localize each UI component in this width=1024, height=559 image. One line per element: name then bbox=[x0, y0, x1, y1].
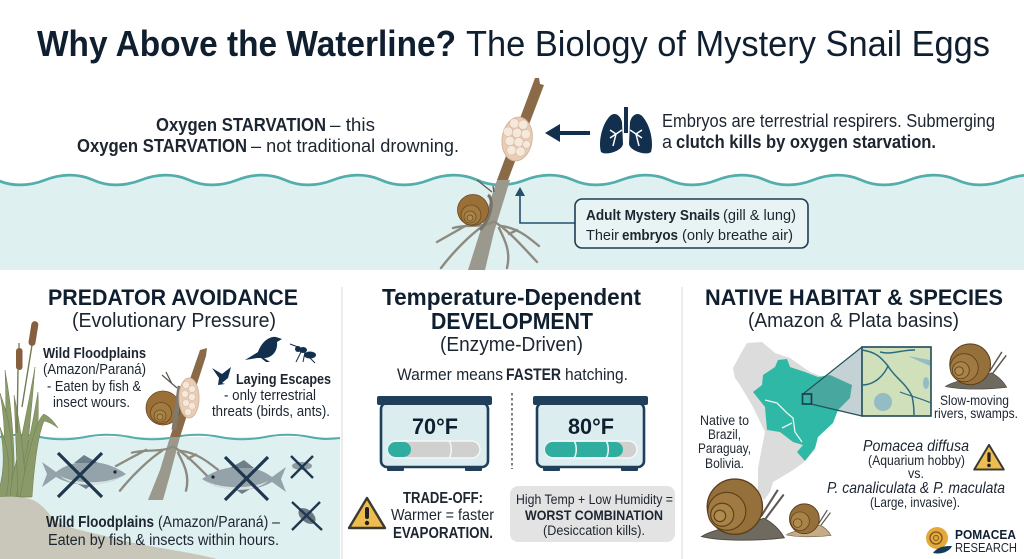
callout: adults vs embryos: Adult Mystery Snails bbox=[586, 207, 720, 224]
worst combination box bbox=[510, 486, 675, 542]
warmer means faster: hatching. bbox=[565, 365, 628, 384]
wild floodplains caption bbox=[46, 514, 280, 549]
subheading: (Evolutionary Pressure) bbox=[72, 310, 276, 332]
title bbox=[37, 23, 990, 64]
stick, snail and eggs bbox=[116, 348, 218, 500]
laying escapes note: Laying Escapes bbox=[236, 371, 331, 388]
wild floodplains note bbox=[43, 345, 146, 411]
wild floodplains note: (Amazon/Paraná) bbox=[43, 361, 146, 378]
native note bbox=[698, 413, 751, 471]
wild floodplains note: - Eaten by fish & bbox=[47, 378, 141, 395]
inset map bbox=[802, 347, 931, 416]
callout: adults vs embryos: embryos bbox=[622, 227, 678, 244]
callout: adults vs embryos: (only breathe air) bbox=[682, 227, 793, 244]
embryos text: a bbox=[662, 132, 673, 152]
warmer means faster: FASTER bbox=[506, 365, 561, 384]
sand bank bbox=[0, 497, 217, 559]
species comparison: (Large, invasive). bbox=[870, 494, 960, 510]
logo bbox=[926, 527, 1017, 555]
tank 70F: 70°F bbox=[412, 414, 458, 439]
icon: flying bird bbox=[212, 367, 231, 385]
map: South America bbox=[733, 342, 852, 500]
oxygen starvation text: – not traditional drowning. bbox=[251, 136, 459, 156]
icon: large snail bbox=[702, 479, 784, 540]
logo: POMACEA bbox=[955, 527, 1017, 542]
trade-off note: TRADE-OFF: bbox=[403, 490, 483, 507]
species comparison: (Aquarium hobby) bbox=[868, 452, 965, 468]
species comparison: vs. bbox=[908, 466, 924, 481]
icon: warning bbox=[349, 498, 385, 528]
divider bbox=[511, 393, 513, 469]
native note: Brazil, bbox=[708, 427, 741, 442]
wild floodplains caption: (Amazon/Paraná) – bbox=[158, 514, 280, 531]
laying escapes note: threats (birds, ants). bbox=[212, 403, 330, 420]
callout arrow bbox=[515, 187, 576, 223]
native note: Native to bbox=[700, 413, 749, 428]
wild floodplains note: insect wours. bbox=[53, 394, 130, 411]
callout: adults vs embryos: (gill & lung) bbox=[723, 207, 796, 224]
warmer means faster bbox=[397, 365, 628, 384]
icon: snail top right bbox=[946, 344, 1007, 389]
worst combination box: WORST COMBINATION bbox=[525, 507, 663, 523]
native note: Paraguay, bbox=[698, 441, 751, 456]
oxygen starvation text: Oxygen STARVATION bbox=[77, 136, 247, 156]
crossed insects bbox=[291, 456, 322, 530]
native note: Bolivia. bbox=[705, 456, 744, 471]
callout: adults vs embryos: Their bbox=[586, 227, 619, 244]
heading: Temperature-Dependent bbox=[382, 284, 641, 310]
callout: adults vs embryos bbox=[575, 199, 808, 248]
trade-off note: EVAPORATION. bbox=[393, 525, 493, 542]
panel dividers bbox=[341, 287, 683, 559]
worst combination box: High Temp + Low Humidity = bbox=[516, 492, 673, 507]
subheading: (Amazon & Plata basins) bbox=[748, 310, 959, 332]
oxygen starvation text: Oxygen STARVATION bbox=[156, 115, 326, 135]
heading: PREDATOR AVOIDANCE bbox=[48, 285, 298, 310]
heading: NATIVE HABITAT & SPECIES bbox=[705, 285, 1003, 310]
slow-moving note: Slow-moving bbox=[940, 392, 1009, 408]
crossed fish bbox=[42, 453, 286, 500]
oxygen starvation text: – this bbox=[330, 115, 375, 135]
title: Why Above the Waterline? bbox=[37, 23, 456, 64]
heading bbox=[382, 284, 641, 334]
tank 80F bbox=[533, 396, 648, 471]
tank 80F: 80°F bbox=[568, 414, 614, 439]
wild floodplains caption: Eaten by fish & insects within hours. bbox=[48, 532, 279, 549]
oxygen starvation text bbox=[77, 115, 459, 156]
reeds bbox=[0, 321, 58, 497]
icon: small snail bbox=[786, 504, 831, 537]
embryos text: Embryos are terrestrial respirers. Submerging bbox=[662, 111, 995, 131]
heading: DEVELOPMENT bbox=[431, 308, 593, 334]
title: The Biology of Mystery Snail Eggs bbox=[466, 23, 990, 64]
species comparison bbox=[827, 438, 1005, 510]
panel: native habitat bbox=[698, 285, 1018, 555]
tank 70F bbox=[377, 396, 492, 471]
laying escapes note bbox=[212, 371, 331, 420]
wild floodplains note: Wild Floodplains bbox=[43, 345, 146, 362]
embryos text bbox=[662, 111, 995, 152]
worst combination box: (Desiccation kills). bbox=[543, 523, 645, 538]
species comparison: Pomacea diffusa bbox=[863, 438, 969, 455]
stick with egg clutch and snail bbox=[437, 78, 544, 270]
laying escapes note: - only terrestrial bbox=[224, 387, 316, 404]
top scene: water band bbox=[0, 175, 1024, 270]
wild floodplains caption: Wild Floodplains bbox=[46, 514, 154, 531]
panel water bbox=[0, 437, 340, 559]
trade-off note bbox=[391, 490, 495, 542]
slow-moving note bbox=[934, 392, 1018, 421]
warmer means faster: Warmer means bbox=[397, 365, 503, 384]
trade-off note: Warmer = faster bbox=[391, 507, 495, 524]
subheading: (Enzyme-Driven) bbox=[440, 334, 583, 356]
embryos text: clutch kills by oxygen starvation. bbox=[676, 132, 936, 152]
arrow to eggs bbox=[545, 124, 590, 142]
icon: lungs bbox=[600, 107, 652, 153]
panel: predator avoidance bbox=[0, 270, 341, 559]
panel: temperature development bbox=[349, 284, 675, 542]
icon: warning bbox=[974, 445, 1004, 469]
icons: bird and ant bbox=[245, 337, 316, 363]
